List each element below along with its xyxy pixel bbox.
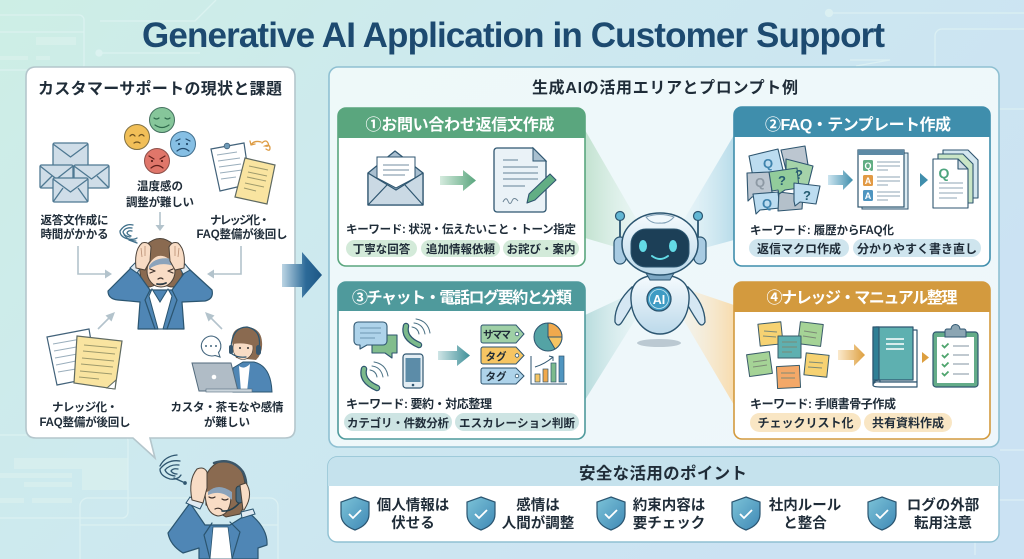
label: knowledge top bbox=[196, 214, 288, 241]
icon: stacked documents bbox=[933, 150, 978, 208]
small arrow card 4 bbox=[922, 352, 929, 363]
pill: escalation bbox=[455, 413, 579, 431]
icon: question bubbles bbox=[747, 146, 820, 214]
point 5: 転用注意 bbox=[914, 514, 972, 532]
heading card 2: ②FAQ・テンプレート作成 bbox=[765, 115, 951, 134]
title: Generative AI Application in Customer Support bbox=[142, 16, 885, 55]
heading: current state: カスタマーサポートの現状と課題 bbox=[38, 80, 282, 98]
icon: pile of emails bbox=[40, 143, 109, 202]
letters in bubbles bbox=[755, 156, 811, 211]
chart: rising bars bbox=[531, 356, 567, 384]
tag: summary: サママ bbox=[483, 329, 511, 341]
pill: categories: カテゴリ・件数分析 bbox=[347, 416, 450, 430]
label: slow replies: 時間がかかる bbox=[40, 227, 108, 241]
point 2: 感情は bbox=[516, 496, 560, 514]
arrow: from left bbox=[78, 246, 112, 278]
pill: categories bbox=[344, 413, 452, 431]
icon: manual book bbox=[873, 327, 917, 387]
robot AI badge: AI bbox=[653, 293, 665, 307]
icon: emotion faces bbox=[124, 108, 196, 174]
point 2: 人間が調整 bbox=[502, 514, 575, 532]
pill: macro: 返信マクロ作成 bbox=[757, 241, 841, 256]
point 2 bbox=[467, 496, 575, 532]
icon: stacked documents: Q bbox=[939, 165, 950, 181]
icon: documents top right bbox=[211, 141, 275, 204]
point 4: 社内ルール bbox=[769, 497, 842, 514]
card 3: chat and phone log bbox=[338, 282, 585, 439]
icon: FAQ window bbox=[858, 150, 908, 209]
illustration: worried agent at bottom bbox=[168, 461, 267, 559]
label: knowledge bottom: ナレッジ化・ bbox=[52, 401, 118, 414]
point 3: 約束内容は bbox=[633, 496, 706, 514]
illustration: stressed support agent bbox=[108, 238, 212, 329]
point 1: 伏せる bbox=[391, 514, 435, 532]
panel: safe usage points bbox=[328, 457, 999, 542]
tag: summary bbox=[481, 325, 524, 343]
robot bbox=[614, 212, 706, 347]
keywords card 1: キーワード: 状況・伝えたいこと・トーン指定 bbox=[346, 222, 576, 236]
pill: rewrite: 分かりやすく書き直し bbox=[857, 241, 977, 256]
icon: smartphone bbox=[403, 354, 423, 388]
panel: AI application areas bbox=[329, 67, 999, 447]
point 5 bbox=[868, 496, 980, 532]
tag: blue: タグ bbox=[486, 370, 507, 383]
small arrow card 2 bbox=[920, 173, 928, 187]
tag: yellow bbox=[481, 347, 524, 364]
point 1: 個人情報は bbox=[377, 496, 450, 514]
point 3 bbox=[597, 496, 706, 532]
icon: documents bottom left bbox=[47, 329, 122, 389]
heading: safe usage: 安全な活用のポイント bbox=[579, 463, 747, 483]
card 4: knowledge and manuals bbox=[734, 282, 990, 439]
label: temperature bbox=[126, 179, 194, 209]
point 1 bbox=[341, 496, 450, 532]
icon: FAQ window: A bbox=[865, 191, 872, 201]
arrow card 1 bbox=[440, 170, 476, 191]
icon: phones bbox=[364, 319, 430, 388]
icon: stress swirl bbox=[120, 225, 137, 243]
robot shadow bbox=[637, 339, 681, 347]
arrow: to stressed agent top bbox=[156, 212, 164, 231]
icon: bottom swirl bbox=[160, 455, 186, 484]
pill: apology: お詫び・案内 bbox=[506, 242, 576, 256]
letters in bubbles: ? bbox=[778, 173, 786, 188]
chart: pie bbox=[534, 323, 562, 351]
icon: FAQ window: A bbox=[865, 176, 872, 186]
heading card 3: ③チャット・電話ログ要約と分類 bbox=[352, 288, 572, 307]
icon: operator at laptop bbox=[192, 327, 272, 392]
letters in bubbles: Q bbox=[763, 156, 773, 171]
pill: escalation: エスカレーション判断 bbox=[459, 416, 576, 430]
point 5: ログの外部 bbox=[907, 496, 980, 514]
label: knowledge top: ナレッジ化・ bbox=[210, 214, 270, 227]
icon: chat bubbles bbox=[354, 322, 397, 358]
tag: yellow: タグ bbox=[486, 350, 507, 363]
keywords card 4: キーワード: 手順書骨子作成 bbox=[750, 396, 896, 411]
heading card 4: ④ナレッジ・マニュアル整理 bbox=[766, 289, 958, 307]
letters in bubbles: Q bbox=[762, 196, 772, 211]
pill: macro bbox=[749, 239, 849, 257]
label: tone: カスタ・茶モなや感情 bbox=[170, 400, 284, 414]
letters in bubbles: Q bbox=[755, 175, 765, 190]
arrow: docs to agent bbox=[98, 312, 115, 329]
pill: apology bbox=[503, 240, 579, 257]
icon: checklist clipboard bbox=[933, 324, 978, 387]
icon: open envelope bbox=[368, 151, 423, 205]
pill: shared docs bbox=[864, 413, 952, 432]
arrow card 2 bbox=[828, 170, 853, 190]
arrow: operator to agent bbox=[205, 312, 222, 329]
arrow card 3 bbox=[438, 345, 470, 366]
label: slow replies: 返答文作成に bbox=[40, 213, 108, 227]
light rays from robot bbox=[585, 130, 734, 405]
heading card 1: ①お問い合わせ返信文作成 bbox=[366, 115, 554, 134]
pill: checklist bbox=[750, 413, 861, 432]
label: tone: が難しい bbox=[204, 415, 250, 429]
icon: document with pen bbox=[494, 148, 556, 212]
point 4 bbox=[732, 497, 842, 532]
heading: AI application: 生成AIの活用エリアとプロンプト例 bbox=[532, 78, 798, 97]
tag: blue bbox=[481, 368, 524, 384]
keywords card 2: キーワード: 履歴からFAQ化 bbox=[750, 224, 894, 237]
label: knowledge bottom bbox=[40, 401, 130, 429]
pill: additional info bbox=[421, 240, 500, 257]
arrow card 4 bbox=[838, 344, 865, 366]
card 1: inquiry reply bbox=[338, 108, 585, 266]
label: knowledge top: FAQ整備が後回し bbox=[196, 227, 288, 241]
icon: FAQ window: Q bbox=[864, 161, 872, 171]
letters in bubbles: ? bbox=[795, 167, 803, 182]
pill: polite answer: 丁寧な回答 bbox=[353, 242, 411, 256]
keywords card 3: キーワード: 要約・対応整理 bbox=[346, 396, 492, 411]
pill: shared docs: 共有資料作成 bbox=[872, 415, 944, 430]
pill: checklist: チェックリスト化 bbox=[757, 416, 854, 430]
point 4: と整合 bbox=[783, 515, 827, 532]
icon: sticky notes bbox=[747, 322, 829, 389]
panel: current state and issues bbox=[26, 67, 295, 458]
pill: additional info: 追加情報依頼 bbox=[426, 242, 495, 256]
point 3: 要チェック bbox=[633, 515, 705, 532]
card 2: FAQ and templates bbox=[734, 107, 990, 266]
label: tone bbox=[170, 400, 284, 429]
pill: polite answer bbox=[346, 240, 417, 257]
letters in bubbles: ? bbox=[803, 188, 811, 203]
label: slow replies bbox=[40, 213, 108, 241]
arrow: issues to AI bbox=[282, 252, 322, 298]
label: knowledge bottom: FAQ整備が後回し bbox=[40, 415, 130, 429]
label: temperature: 温度感の bbox=[137, 179, 183, 193]
label: temperature: 調整が難しい bbox=[126, 195, 194, 209]
arrow: from right bbox=[207, 246, 241, 278]
